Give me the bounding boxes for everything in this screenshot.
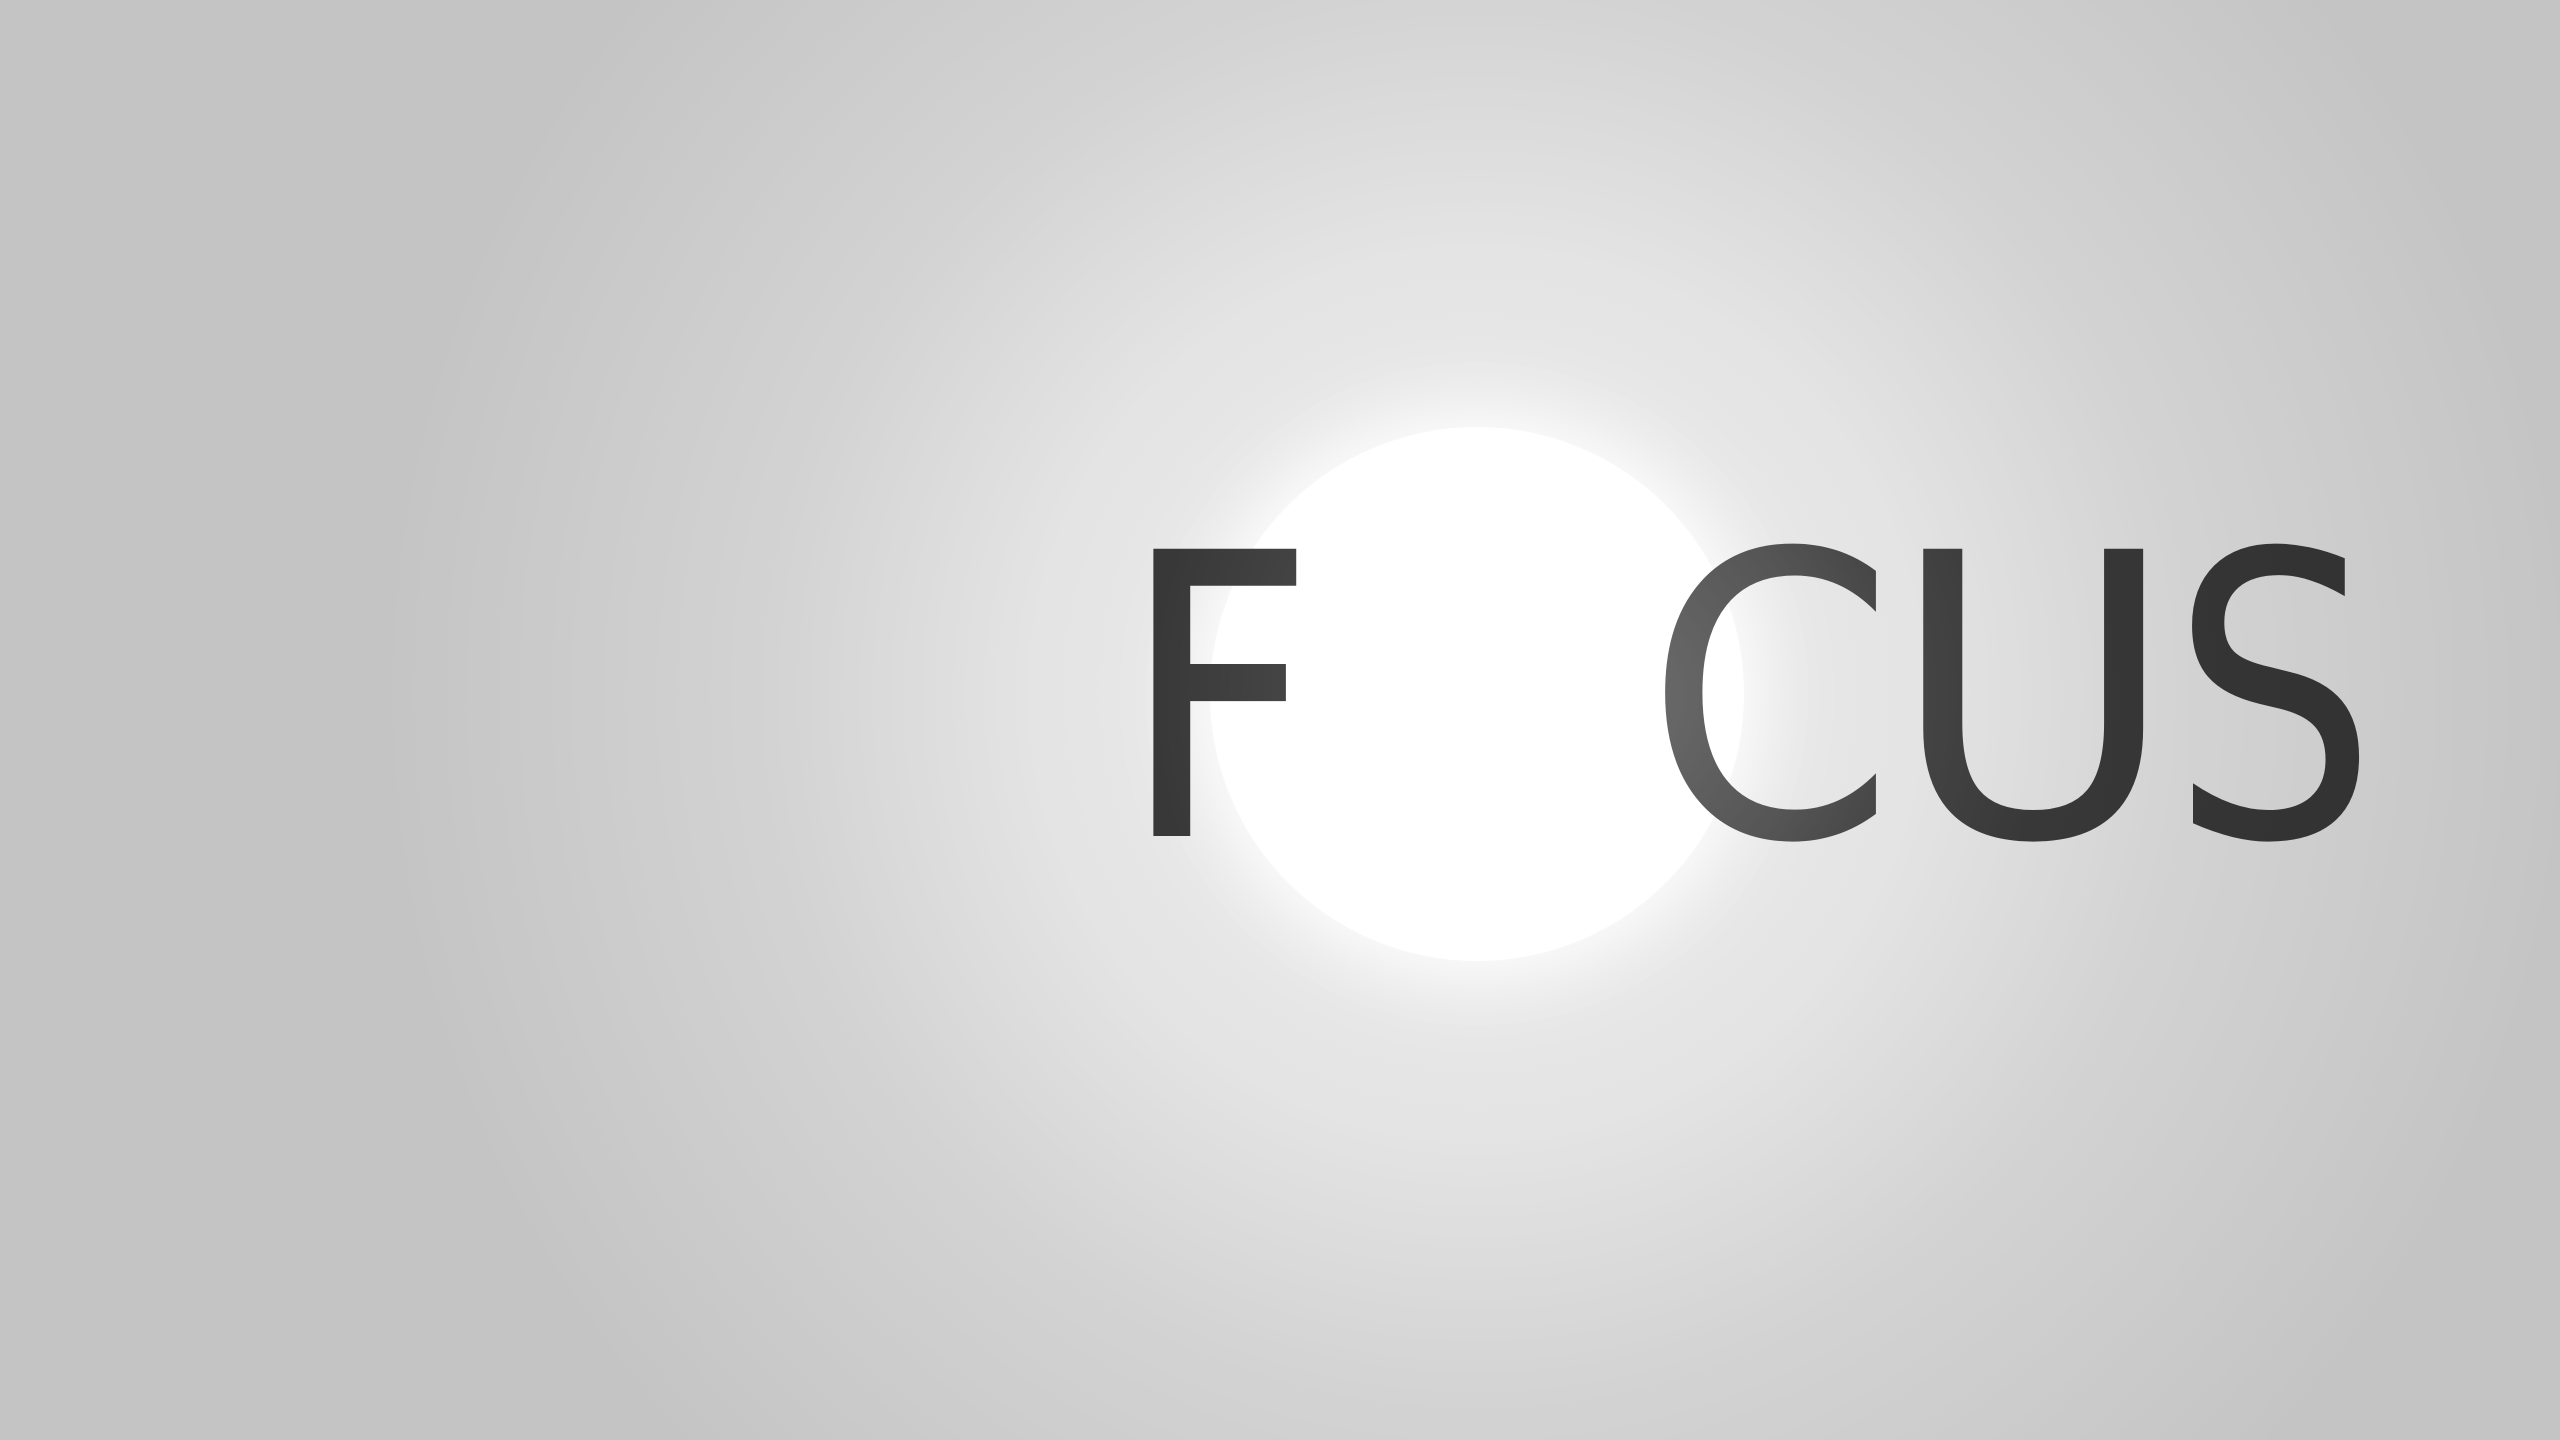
letter C: C xyxy=(1645,470,1895,929)
letter F: F xyxy=(1123,474,1313,925)
letter U: U xyxy=(1889,470,2177,929)
title: FOCUS xyxy=(1123,470,2377,930)
letter S: S xyxy=(2171,472,2377,930)
circle glow xyxy=(1192,409,1762,979)
white spotlight circle standing in for the letter O xyxy=(1210,427,1744,961)
